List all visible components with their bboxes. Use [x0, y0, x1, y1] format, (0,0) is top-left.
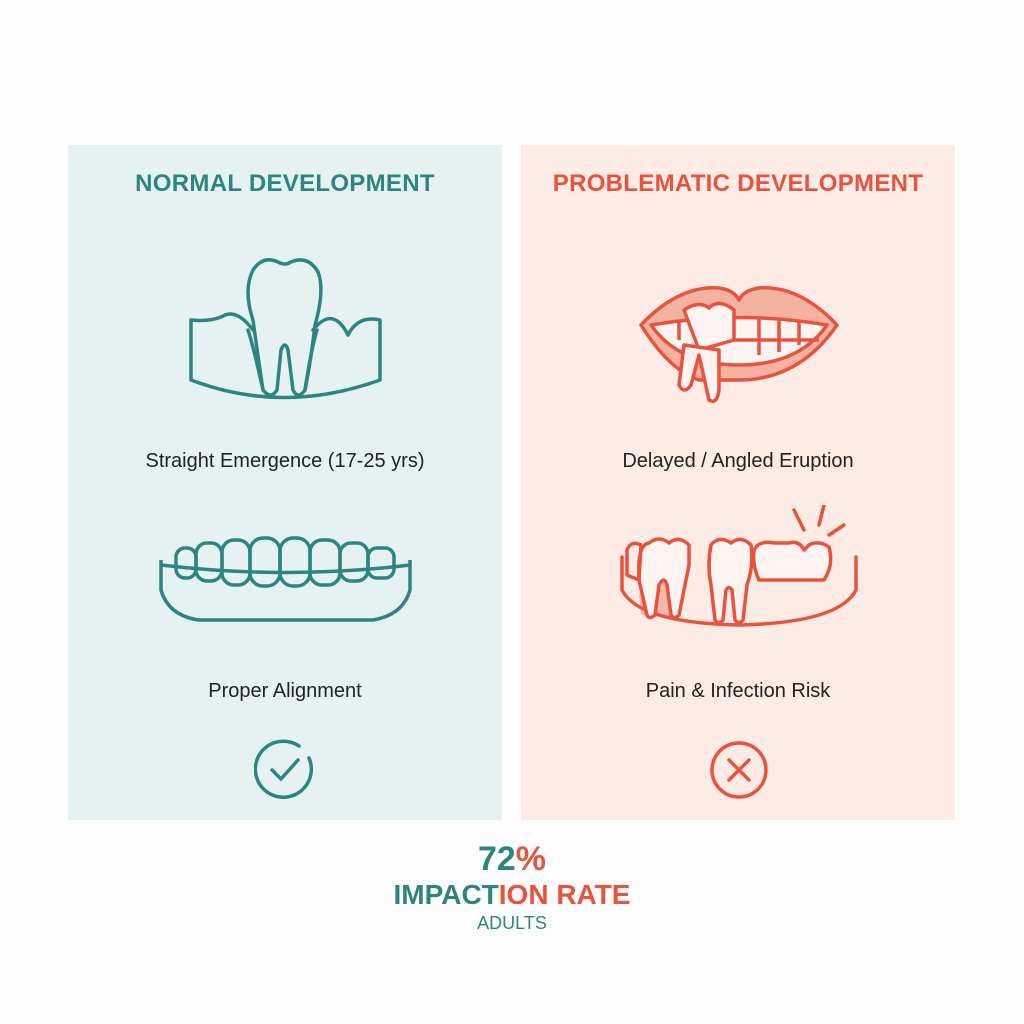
label: straight emergence: Straight Emergence (17-25 yrs)	[145, 450, 424, 472]
icon: single tooth in gum	[189, 258, 382, 400]
label: proper alignment: Proper Alignment	[208, 680, 362, 702]
stat sub: adults: ADULTS	[477, 913, 547, 933]
icon: aligned teeth	[159, 536, 412, 622]
panel: problematic development	[521, 145, 955, 820]
icon: mouth with angled tooth	[639, 286, 839, 403]
heading: normal: NORMAL DEVELOPMENT	[135, 170, 435, 197]
stat: 72%: 72%	[478, 840, 546, 878]
icon: x	[710, 741, 768, 799]
stat label: impaction rate: IMPACTION RATE	[394, 879, 630, 910]
label: pain risk: Pain & Infection Risk	[646, 680, 830, 702]
icon: check	[254, 740, 314, 799]
label: delayed eruption: Delayed / Angled Eruption	[622, 450, 854, 472]
heading: problematic: PROBLEMATIC DEVELOPMENT	[553, 170, 923, 197]
icon: crowded teeth with pain	[620, 505, 858, 627]
panel: normal development	[68, 145, 502, 820]
